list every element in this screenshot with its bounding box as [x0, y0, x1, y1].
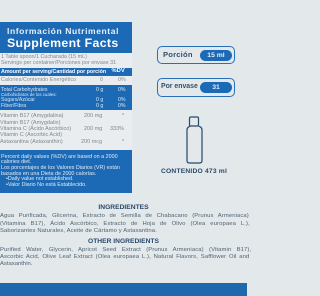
text: other ingredients list: Purified Water, Glycerin, Apricot Seed Extract (Prunus Armeniaca) (Vitamin B17), — [0, 247, 251, 253]
text: serving size: Servings per container/Porciones por envase 31 — [1, 60, 116, 66]
row: calories: 0% — [118, 77, 126, 83]
table header row: %DV — [112, 68, 125, 74]
rows: vitamins: Vitamin B17 (Amygdalina) — [0, 113, 63, 119]
pill: 15 ml — [200, 50, 232, 61]
text: ingredientes list — [0, 213, 250, 234]
pill: 31 — [200, 82, 232, 93]
rows: carbohydrates: Total Carbohydrates — [1, 86, 47, 92]
heading: other ingredients: OTHER INGREDIENTS — [88, 238, 159, 245]
rows: carbohydrates — [0, 85, 132, 110]
rows: vitamins: * — [122, 139, 124, 145]
text: footnotes: basados en una Dieta de 2000 calorías. — [1, 170, 96, 176]
text: footnotes: •Valor Diario No está Establecido. — [6, 182, 87, 188]
rows: carbohydrates: 0% — [118, 102, 126, 108]
rows: vitamins — [0, 113, 124, 145]
rows: vitamins: Vitamin B17 (Amygdalin) — [0, 120, 60, 126]
text: serving size — [1, 54, 116, 66]
pill: 31: 31 — [212, 84, 220, 91]
icon: bottle — [186, 116, 203, 164]
rows: vitamins: 200 mg — [84, 113, 102, 119]
panel: nutrition facts table — [0, 22, 132, 193]
text: footnotes: Los porcentajes de los Valores Diarios (VR) están — [1, 164, 120, 170]
rows: vitamins: Vitamina C (Ácido Ascórbico) — [0, 126, 71, 132]
callout: servings per container — [157, 78, 235, 97]
rows: vitamins: Vitamin C (Ascorbic Acid) — [0, 132, 62, 138]
row: calories: Calories/Contenido Energético — [1, 77, 76, 83]
rows: carbohydrates: Sugars/Azúcar — [1, 96, 35, 102]
rows: vitamins: Astaxantina (Astaxanthin) — [0, 139, 63, 145]
row: calories — [1, 77, 126, 83]
text: contenido 473 ml: CONTENIDO 473 ml — [161, 168, 227, 174]
rows: carbohydrates: 0 g — [96, 102, 103, 108]
text: ingredientes list: Agua Purificada, Glicerina, Extracto de Semilla de Chabacano (Prunus Armeniaca) — [0, 213, 249, 219]
rows: carbohydrates: 0 g — [96, 86, 103, 92]
rows: carbohydrates: 0 g — [96, 96, 103, 102]
text: ingredientes list: Saborizantes Naturales, Aceite de Cártamo y Astaxantina. — [0, 228, 157, 234]
text: other ingredients list: Ascorbic Acid, Olive Leaf Extract (Olea europaea L.), Natural Flavors, Safflower Oil and — [0, 254, 249, 260]
pill: 15 ml: 15 ml — [207, 52, 225, 59]
rows: vitamins: * — [122, 113, 124, 119]
footer band — [0, 283, 247, 296]
text: serving size: 1 Table spoon/1 Cucharada (15 mL) — [1, 54, 87, 60]
heading: supplement facts header: Información Nutrimental — [7, 26, 119, 36]
text: other ingredients list — [0, 247, 251, 267]
rows: carbohydrates: 0% — [118, 86, 126, 92]
text: footnotes: •Daily value not established. — [6, 176, 74, 182]
text: other ingredients list: Astaxanthin. — [0, 261, 32, 267]
callout: serving size — [157, 46, 235, 64]
table header row: Amount per serving/Cantidad por porción — [1, 68, 106, 74]
text: footnotes: calories diet. — [1, 158, 31, 164]
row: calories: 0 — [100, 77, 103, 83]
text: footnotes: Percent daily values (%DV) are based on a 2000 — [1, 154, 118, 160]
label: porción: Porción — [163, 50, 193, 59]
rows: carbohydrates: 0% — [118, 96, 126, 102]
rows: vitamins: 200 mg — [84, 126, 102, 132]
text: ingredientes list: (Vitamina B17), Ácido Ascórbico, Extracto de Hoja de Olivo (Olea europaea L.), — [0, 221, 250, 227]
table header row — [0, 68, 132, 76]
heading: supplement facts header: Supplement Facts — [7, 36, 119, 50]
rows: vitamins: 333% — [110, 126, 124, 132]
label: por envase: Por envase — [161, 83, 198, 90]
heading: ingredientes: INGREDIENTES — [98, 204, 149, 211]
rows: carbohydrates: Carbohidratos de los cuales: — [1, 92, 57, 97]
text: footnotes — [0, 150, 132, 193]
heading: supplement facts header — [0, 22, 132, 53]
rows: vitamins: 200 mcg — [81, 139, 102, 145]
rows: carbohydrates: Fiber/Fibra — [1, 102, 26, 108]
